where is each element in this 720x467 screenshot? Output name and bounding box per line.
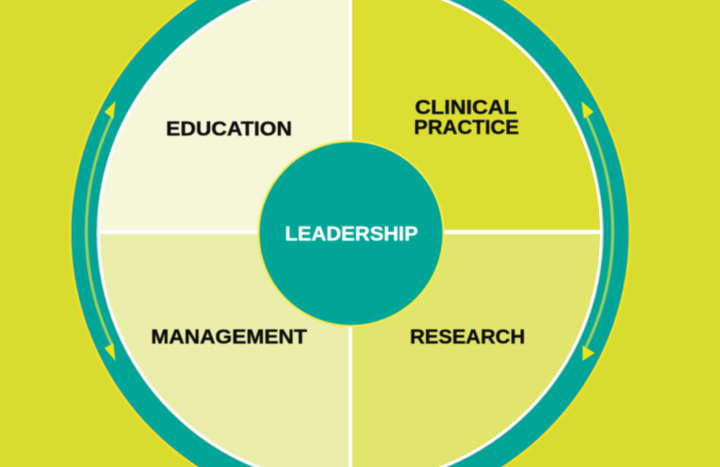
right double arrow — [582, 102, 613, 360]
quadrant: clinical practice — [350, 0, 610, 231]
center circle: leadership — [258, 140, 444, 327]
quadrant: research — [350, 233, 610, 467]
outer teal ring — [69, 0, 631, 467]
clinical practice edge — [352, 0, 354, 142]
left double arrow — [86, 102, 115, 360]
label: clinical practice: CLINICAL — [415, 97, 517, 119]
wheel quadrants — [90, 0, 610, 467]
label: clinical practice — [414, 97, 519, 139]
label: education: EDUCATION — [166, 118, 292, 140]
label: clinical practice: PRACTICE — [414, 117, 519, 139]
quadrant: management — [90, 233, 350, 467]
label: leadership: LEADERSHIP — [285, 224, 418, 246]
quadrant: education — [90, 0, 350, 231]
infographic: leadership wheel — [68, 0, 632, 467]
horizontal divider — [90, 230, 610, 234]
label: research: RESEARCH — [410, 326, 525, 348]
label: management: MANAGEMENT — [151, 326, 307, 348]
vertical divider — [348, 0, 352, 467]
